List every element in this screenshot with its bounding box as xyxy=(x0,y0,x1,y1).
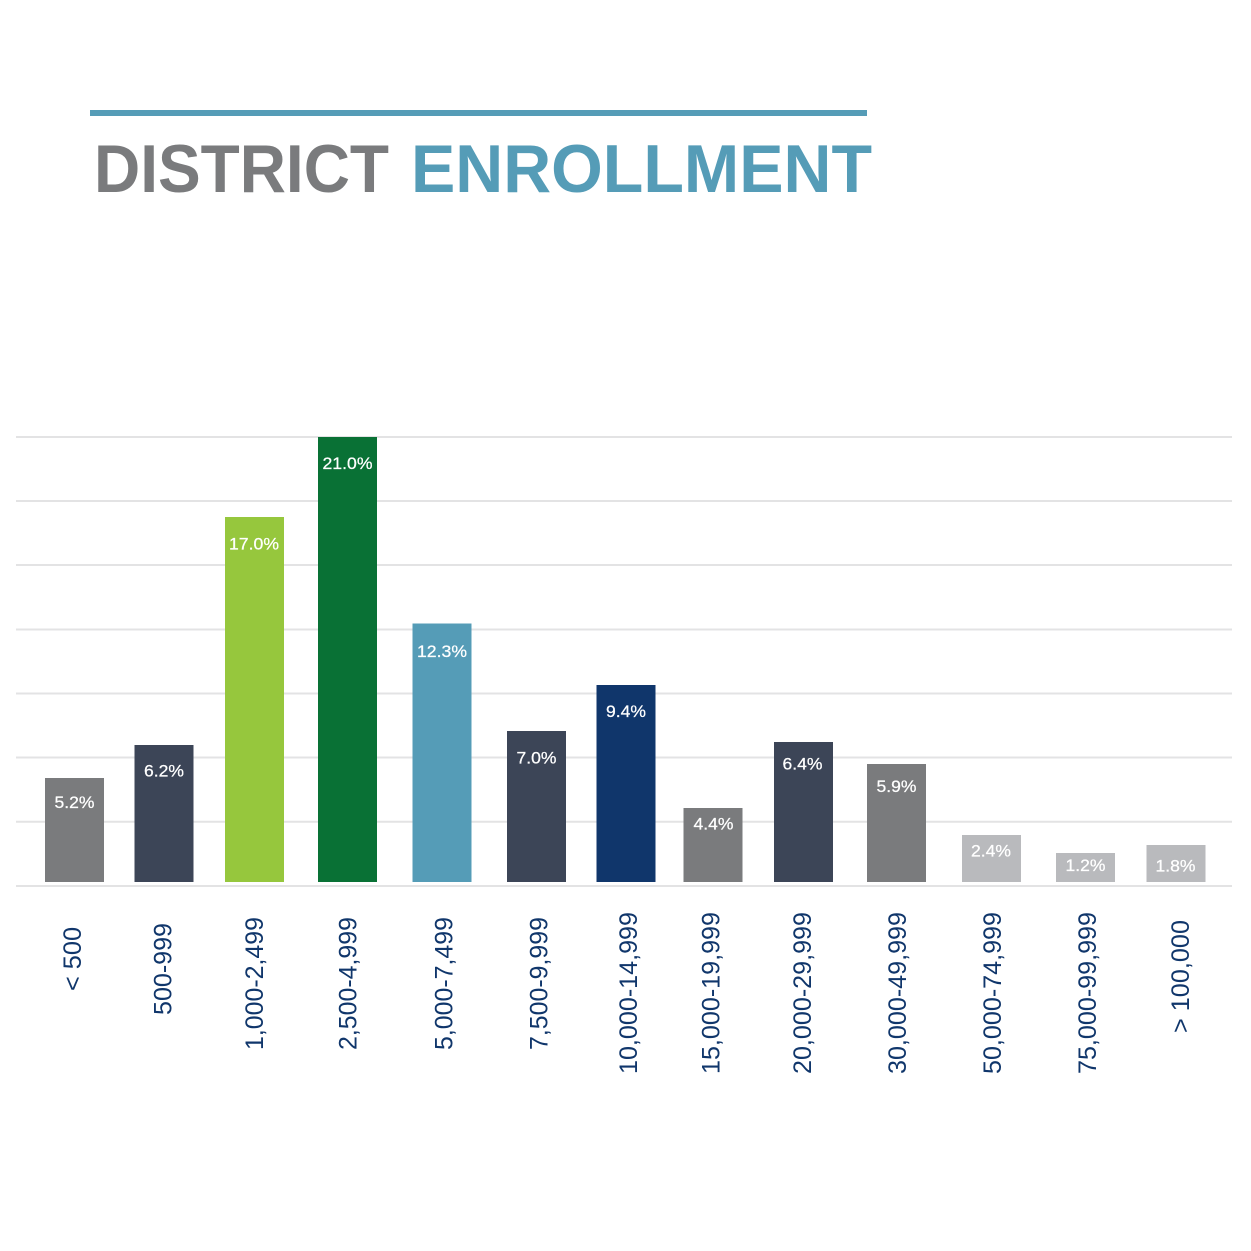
axis labels: 75,000-99,999 xyxy=(1074,912,1102,1074)
axis labels: > 100,000 xyxy=(1167,920,1195,1033)
axis labels: 10,000-14,999 xyxy=(615,912,643,1074)
bar: 2,500-4,999 xyxy=(318,437,377,882)
bar: 15,000-19,999 xyxy=(684,808,742,882)
bar: 50,000-74,999 xyxy=(962,835,1021,882)
bar: 75,000-99,999: 1.2% xyxy=(1066,856,1106,875)
axis labels: 500-999 xyxy=(150,923,178,1015)
bar: > 100,000 xyxy=(1146,845,1206,882)
bar: 500-999 xyxy=(134,745,194,882)
bar: 7,500-9,999: 7.0% xyxy=(516,748,556,768)
bar: 30,000-49,999 xyxy=(867,764,926,882)
bar: 10,000-14,999 xyxy=(596,685,656,882)
bar: 1,000-2,499 xyxy=(225,517,284,882)
bar: 500-999: 6.2% xyxy=(144,762,184,780)
axis labels: 30,000-49,999 xyxy=(884,912,912,1074)
bar: 5,000-7,499 xyxy=(412,624,472,882)
bar: 2,500-4,999: 21.0% xyxy=(322,454,372,473)
axis labels: 15,000-19,999 xyxy=(698,912,726,1074)
bar: 7,500-9,999 xyxy=(507,731,566,882)
bar: 5,000-7,499: 12.3% xyxy=(417,642,467,661)
axis labels: 7,500-9,999 xyxy=(526,917,554,1050)
axis labels: 5,000-7,499 xyxy=(430,917,458,1050)
title: ENROLLMENT xyxy=(411,131,872,207)
axis labels: 20,000-29,999 xyxy=(789,912,817,1074)
bar: < 500 xyxy=(45,778,104,882)
axis labels: 1,000-2,499 xyxy=(241,917,269,1050)
bar: 20,000-29,999 xyxy=(774,742,833,882)
bar: < 500: 5.2% xyxy=(54,793,94,812)
axis labels: 2,500-4,999 xyxy=(334,917,362,1050)
bar: 20,000-29,999: 6.4% xyxy=(782,754,822,774)
bar: 15,000-19,999: 4.4% xyxy=(694,814,734,834)
bar: 10,000-14,999: 9.4% xyxy=(606,702,646,721)
bar: 75,000-99,999 xyxy=(1056,853,1115,882)
bar chart xyxy=(16,437,1232,886)
bar: 50,000-74,999: 2.4% xyxy=(971,842,1011,860)
title: DISTRICT xyxy=(94,131,389,207)
title rule xyxy=(90,110,867,116)
axis labels: < 500 xyxy=(59,927,87,991)
bar: 30,000-49,999: 5.9% xyxy=(876,777,916,796)
axis labels: 50,000-74,999 xyxy=(979,912,1007,1074)
bar: 1,000-2,499: 17.0% xyxy=(229,534,279,554)
bar: > 100,000: 1.8% xyxy=(1156,856,1196,876)
axis labels xyxy=(59,912,1195,1074)
title xyxy=(94,131,872,207)
